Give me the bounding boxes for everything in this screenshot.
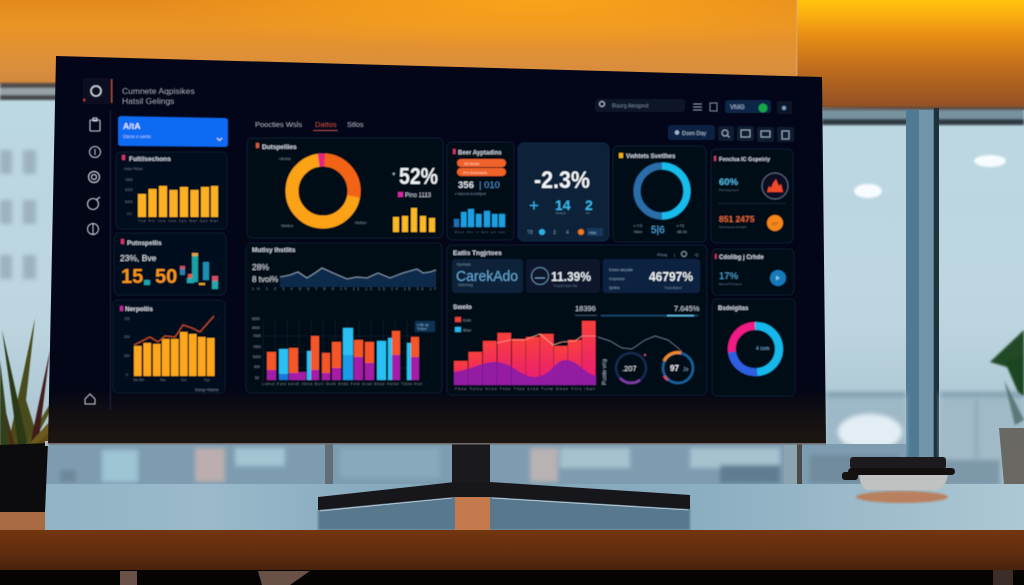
bar chart axis: 7000 xyxy=(253,334,261,338)
axis labels: 250 xyxy=(124,335,130,339)
trend line xyxy=(134,316,214,345)
gauge left xyxy=(616,353,646,383)
pills: Pro Estoneris xyxy=(463,170,487,175)
gauge right: Jo xyxy=(683,367,688,373)
stat labels: 7.645% xyxy=(674,304,700,313)
axis labels: Cyc xyxy=(204,378,210,382)
stat: 851 2475 xyxy=(719,214,755,224)
tile: percent: Tnocst hurd 4ts xyxy=(553,284,577,288)
tile: big percent: Cnpnsss xyxy=(609,276,625,281)
legend: ▪ 7.0 xyxy=(634,223,643,228)
captions: Hs xyxy=(586,211,590,215)
tabs: Dattos xyxy=(315,120,337,129)
icon: home xyxy=(85,394,95,404)
gauge right: 97 xyxy=(670,364,679,373)
panel: pills and bars: Bsot Sbr tr doe ge mat xyxy=(455,230,505,234)
area line chart xyxy=(280,268,436,287)
axis labels: Sec xyxy=(160,378,166,382)
legend: d8 2s xyxy=(677,229,687,234)
panel: card bars 1 xyxy=(116,152,227,229)
tile: percent: 11.39% xyxy=(551,270,591,284)
mini bars xyxy=(393,208,435,232)
legend xyxy=(634,223,687,234)
panel: small stat: Busurd Tntlnghur xyxy=(719,282,742,286)
blue selector card: A/tA xyxy=(123,121,140,131)
tile: big percent: Qnlhs xyxy=(609,285,619,290)
chart legend xyxy=(415,321,435,332)
dark reflection of base xyxy=(318,497,690,530)
heading: Eatlis Tngjrtoes xyxy=(453,250,502,257)
brand title: Cumnete Aqpisikes xyxy=(122,86,195,96)
leaves xyxy=(0,318,92,450)
panel: donut main xyxy=(247,138,443,238)
divider xyxy=(718,202,786,205)
values: 2 xyxy=(585,197,593,213)
legend: ▪ 73 xyxy=(677,223,685,228)
axis labels xyxy=(124,167,143,216)
small labels: Stretion xyxy=(281,224,293,228)
bar chart xyxy=(138,186,218,217)
big value: -2.3% xyxy=(534,167,590,194)
panel: donut tricolour xyxy=(712,299,795,396)
captions: Rptasd xyxy=(556,211,566,215)
plant pot xyxy=(0,443,48,512)
axis labels: Oct xyxy=(181,378,186,382)
red area bars xyxy=(454,321,596,385)
heading: Nerpoliis xyxy=(125,306,153,313)
stacked bars xyxy=(144,253,218,289)
status pill xyxy=(725,100,771,113)
thin line chart xyxy=(598,336,682,352)
brand title: Hatsil Gelings xyxy=(122,96,174,106)
status pill: VNIG xyxy=(730,105,745,111)
icon: bell xyxy=(777,101,792,114)
monitor xyxy=(48,56,826,444)
pager: 4 xyxy=(566,230,569,236)
panel: card bars and line xyxy=(113,300,225,393)
axis labels: Sto 5th xyxy=(133,378,144,382)
orange badge: 10P xyxy=(771,221,778,226)
tabs: Poocties Wsls xyxy=(255,120,302,129)
grouped bars xyxy=(267,328,419,380)
subheading: Swelo xyxy=(453,304,472,311)
controls: : Q xyxy=(693,252,698,257)
bowl xyxy=(859,474,948,490)
panel: small stat xyxy=(712,249,794,295)
plant right xyxy=(990,330,1024,484)
big orange number: 15 xyxy=(121,266,143,288)
donut chart xyxy=(732,326,779,372)
gauge right xyxy=(663,353,693,383)
wall: orange left and centre xyxy=(0,0,800,107)
grid xyxy=(263,319,418,382)
controls: Rtsay xyxy=(657,252,667,257)
values: 14 xyxy=(555,197,571,213)
legend xyxy=(455,317,471,332)
bar chart axis xyxy=(252,317,261,380)
legend: Pino 1113 xyxy=(405,193,432,199)
small labels xyxy=(279,157,367,228)
bar chart xyxy=(134,332,214,376)
stat: | 010 xyxy=(479,180,500,191)
controls xyxy=(657,252,698,257)
toolbar icons xyxy=(722,130,789,139)
axis labels: 250 xyxy=(124,354,130,358)
bar chart axis: 4000 xyxy=(252,326,260,330)
date button: Dsen Day xyxy=(682,131,706,137)
donut chart xyxy=(288,156,358,226)
mini chart badge xyxy=(762,173,788,199)
stat labels: 8 tvoi% xyxy=(252,275,278,284)
stand base xyxy=(318,482,690,510)
legend xyxy=(398,192,432,199)
table legs xyxy=(120,570,1013,585)
small labels: Mettion xyxy=(355,221,367,225)
axis ticks: 1% 1 2 3 4 5 6 7 8 9 10 11 12 13 14 15 16 17 xyxy=(252,287,436,291)
light line xyxy=(497,334,596,345)
ceiling lights xyxy=(854,155,1006,198)
big percent: 52% xyxy=(399,163,438,189)
tile: text: CarekAdo xyxy=(456,269,518,285)
x labels: Fbse Toltu Hrsd Ttde Ttze Lrss Tuim Dnse Ttrn Ihan xyxy=(455,387,595,391)
heading: Mutlsy Ihstlits xyxy=(252,247,296,254)
window frame strip left xyxy=(0,83,60,100)
axis labels: 5000 xyxy=(125,188,133,192)
big orange number xyxy=(121,266,177,288)
wall seam xyxy=(796,0,798,75)
search xyxy=(595,99,685,112)
lower window strip xyxy=(46,444,1000,486)
values xyxy=(529,196,593,215)
window frame strip right xyxy=(822,107,1024,125)
balcony railing blur xyxy=(826,392,1024,467)
heading: Dutspellies xyxy=(262,144,297,151)
button xyxy=(770,270,786,286)
dashboard screen xyxy=(83,78,795,410)
panel: analytics xyxy=(447,245,707,395)
pager: Hstn xyxy=(589,231,596,235)
object stack on desk xyxy=(842,457,955,503)
monitor bezel xyxy=(48,56,826,444)
panel: right metrics xyxy=(711,149,793,243)
wall: orange right panel xyxy=(797,0,1024,110)
date button xyxy=(668,125,715,140)
sidebar rule xyxy=(110,110,111,410)
search: Rasrg Atnqpnd xyxy=(612,104,648,110)
month labels: Tue Fri Jun Jun Jan Mar Del Mar xyxy=(138,219,219,223)
big orange number: 50 xyxy=(155,266,177,288)
centre label: 4 ssm xyxy=(756,346,769,352)
desk xyxy=(0,484,1024,585)
heading: Fultilsechons xyxy=(129,156,171,163)
heading: Cdolibg j Crhde xyxy=(719,255,764,261)
book xyxy=(850,457,946,469)
desk top surface xyxy=(0,484,1024,530)
wall: centre glow xyxy=(100,0,800,90)
foot highlights xyxy=(320,498,688,511)
text stat: 23%, Bve xyxy=(120,253,157,263)
icon: leaf xyxy=(88,197,100,210)
panel: right metrics: Fluit ltsuy lsusl xyxy=(719,188,739,192)
axis labels xyxy=(124,317,210,382)
pager xyxy=(527,228,603,236)
axis labels: 0 0 xyxy=(127,212,132,216)
toolbar squares xyxy=(718,126,794,142)
blue selector card xyxy=(118,116,228,147)
orange reflection under neck xyxy=(455,497,490,530)
left warm reflection xyxy=(0,512,45,530)
stat: 17% xyxy=(719,271,739,282)
stat labels: 18396 xyxy=(575,304,596,313)
plant right pot xyxy=(999,428,1024,484)
panel: KPI blue xyxy=(518,143,609,241)
bar chart axis: 7000 xyxy=(253,345,261,349)
legend: Hsrv xyxy=(634,229,642,234)
donut chart xyxy=(637,166,687,216)
blue selector card: Cteos x uanto xyxy=(123,134,151,139)
icon: at xyxy=(88,172,100,182)
tabs: Stlos xyxy=(347,120,364,129)
heading: Fenclsa IC Gspeiriy xyxy=(719,157,771,163)
pills xyxy=(457,159,506,176)
values: + xyxy=(529,196,539,215)
axis labels: 0 xyxy=(126,373,128,377)
brand title xyxy=(122,86,195,106)
desk front edge xyxy=(0,530,1024,571)
tile: text: Eponays xyxy=(457,262,471,266)
controls: | xyxy=(674,252,675,257)
tile: big percent: 46797% xyxy=(649,269,693,284)
axis labels: Hsite Pldton xyxy=(124,167,143,171)
tile: text: Dsbnisng xyxy=(458,283,473,287)
gauge left: .207 xyxy=(622,364,637,373)
handle xyxy=(842,472,858,480)
icon: info xyxy=(90,146,100,158)
panel: donut blue xyxy=(613,146,706,242)
icon: gift xyxy=(710,103,717,111)
tile: big percent xyxy=(603,259,700,293)
heading: Bsdeigitas xyxy=(718,306,749,312)
under desk shadow xyxy=(0,570,1024,585)
reflection xyxy=(856,491,948,503)
chart legend: Tutton xyxy=(417,327,427,331)
tile: big percent: Eeisd alepale xyxy=(609,267,634,272)
vertical text: Piustte vrlig xyxy=(602,359,608,385)
sidebar xyxy=(83,78,195,410)
captions xyxy=(556,211,590,215)
bar chart axis: 400 xyxy=(254,365,260,369)
tabs xyxy=(255,120,364,131)
progress bar xyxy=(575,315,698,316)
stat labels xyxy=(575,304,700,313)
x labels: Lobue Futz Lerdt Jdlus Dorr Oute Shdc Fote Grae Dsde Heldz Tlsss Hsd xyxy=(262,382,422,386)
panel: donut main: + xyxy=(392,172,396,178)
legend: Bhsd xyxy=(463,328,471,332)
bar chart axis: 5000 xyxy=(253,355,261,359)
pager: T8 xyxy=(527,230,533,236)
tile: percent xyxy=(526,259,600,293)
heading: Putnspellis xyxy=(127,240,162,247)
tray lid xyxy=(848,468,955,475)
top bar controls xyxy=(595,99,794,142)
bar chart axis: 50 xyxy=(255,376,259,380)
pills: 30 Aussi xyxy=(464,161,479,166)
caption: • Yaticme trumblpiot xyxy=(455,192,486,196)
monitor stand xyxy=(318,444,690,511)
tile: big percent: Thsd Alded xyxy=(664,286,682,290)
small labels: Hisrites xyxy=(279,157,291,161)
footnote: Dstup Hlisme xyxy=(195,387,220,392)
axis labels: 5000 xyxy=(125,200,133,204)
logo tile xyxy=(83,78,110,104)
heading: Beer Ayptadins xyxy=(458,150,502,156)
heading: Vwhtets Svetlhes xyxy=(626,154,676,160)
red accent xyxy=(111,79,112,103)
panel: card stacked xyxy=(114,233,226,295)
panel: line and grouped bars xyxy=(246,243,442,393)
stat labels xyxy=(252,262,278,284)
stand neck xyxy=(452,444,490,484)
plant left xyxy=(0,318,92,512)
stat xyxy=(458,180,500,191)
stat: 356 xyxy=(458,180,474,191)
panel: right metrics: Tannnscone wt Hanf xyxy=(719,225,746,229)
window pillar right xyxy=(906,108,939,466)
window backdrop xyxy=(0,80,1024,485)
bar chart xyxy=(454,209,505,227)
pager: 3 xyxy=(553,230,556,236)
icon: menu xyxy=(693,104,702,110)
icon: dollar xyxy=(88,224,98,234)
panel: pills and bars xyxy=(447,142,514,240)
axis labels: 7800 xyxy=(125,178,133,182)
chart legend: Lrtte ap xyxy=(417,323,429,327)
left building blur xyxy=(0,150,36,279)
axis labels: 750 xyxy=(124,317,130,321)
purple wave xyxy=(454,360,596,385)
stat: 60% xyxy=(719,177,739,188)
legend: Eolot xyxy=(463,318,471,322)
value: 5|6 xyxy=(651,225,665,236)
icon: clipboard xyxy=(90,118,100,131)
tile: text xyxy=(452,259,523,293)
stat labels: 28% xyxy=(252,262,269,272)
bar chart axis: 5000 xyxy=(252,317,260,321)
